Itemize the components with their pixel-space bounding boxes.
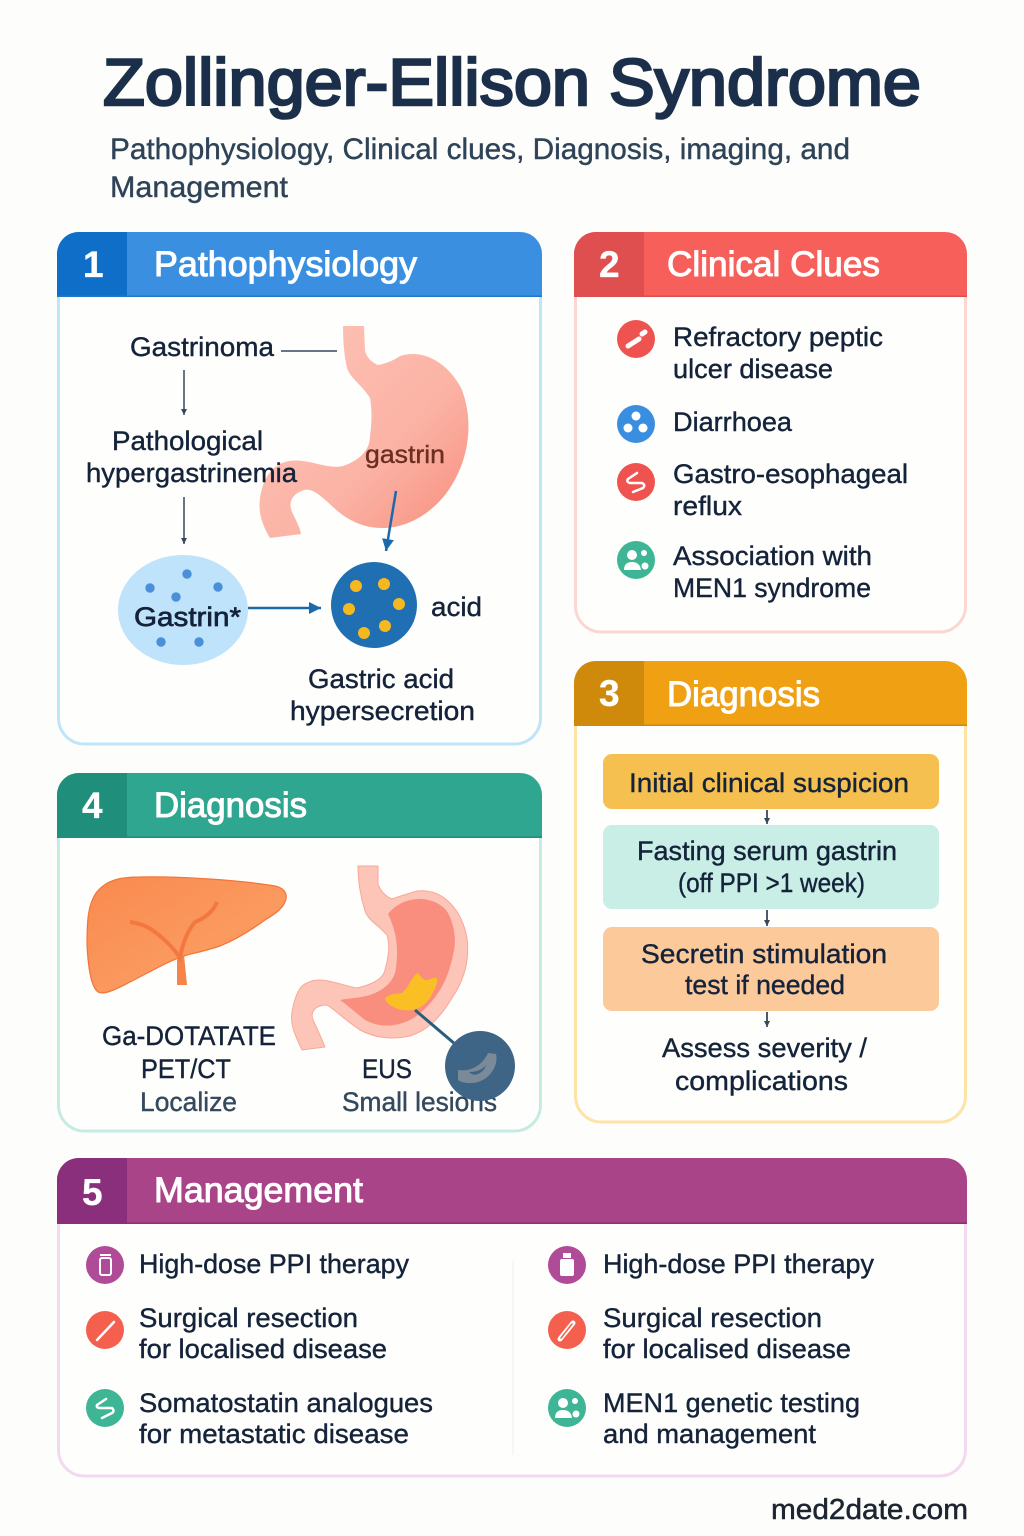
clue: diarrhoea [617,405,793,443]
gastrin cell [118,555,248,665]
header: clinical clues: Clinical Clues [667,245,880,284]
step: secretin stimulation test [603,927,939,1011]
subtitle: Pathophysiology, Clinical clues, Diagnosis, imaging, and [110,133,850,166]
step: initial clinical suspicion: Initial clinical suspicion [629,768,909,798]
panel: clinical clues [574,232,967,632]
item: high-dose ppi therapy [86,1246,409,1284]
panel: diagnosis pathway [574,661,967,1122]
clue: refractory peptic ulcer disease: ulcer disease [673,354,833,384]
step: secretin stimulation test: Secretin stimulation [641,939,887,969]
header: pathophysiology: 1 [83,244,104,285]
step: initial clinical suspicion [603,754,939,809]
clue: association with MEN1 syndrome: Association with [673,541,872,571]
step: assess severity: Assess severity / [662,1033,867,1063]
item: surgical resection (right): Surgical resection [603,1303,822,1333]
step: secretin stimulation test: test if needed [685,970,845,1000]
label: gastrin on stomach: gastrin [365,441,445,469]
arrow: hypergastrinemia to gastrin [183,497,185,544]
item: surgical resection (right) [548,1303,851,1364]
clue: association with MEN1 syndrome: MEN1 syndrome [673,573,871,603]
panel: management [57,1158,967,1476]
header: diagnosis [57,773,542,838]
header: diagnosis: Diagnosis [154,786,307,825]
clue: gastro-esophageal reflux [617,459,908,521]
label: ga-dotatate pet/ct [102,1021,276,1117]
item: surgical resection (right): for localised disease [603,1334,851,1364]
endoscopic ultrasound callout [415,1010,515,1101]
item: high-dose ppi therapy (right) [548,1246,874,1284]
label: eus small lesions [342,1054,497,1117]
label: gastric acid hypersecretion: Gastric acid [308,664,454,694]
label: ga-dotatate pet/ct: PET/CT [141,1054,231,1084]
header: pathophysiology: Pathophysiology [154,245,418,284]
label: gastrinoma with connector: Gastrinoma [130,332,275,362]
acid cell [331,562,417,648]
label: gastric acid hypersecretion: hypersecretion [290,696,475,726]
label: ga-dotatate pet/ct: Ga-DOTATATE [102,1021,276,1051]
item: surgical resection [86,1303,387,1364]
source credit: med2date.com [771,1494,968,1526]
label: pathological hypergastrinemia: Pathological [112,426,263,456]
panel: pathophysiology [57,232,542,744]
step: fasting serum gastrin [603,825,939,909]
arrow: gastrinoma to hypergastrinemia [183,370,185,415]
item: somatostatin analogues: Somatostatin analogues [139,1388,433,1418]
step: assess severity [662,1033,867,1096]
item: men1 genetic testing [548,1388,860,1449]
header: management: 5 [82,1172,103,1213]
arrow [766,1012,768,1027]
clue: gastro-esophageal reflux: reflux [673,491,743,521]
arrow: gastrin to acid [248,607,321,609]
stomach illustration [259,326,468,538]
item: surgical resection: for localised disease [139,1334,387,1364]
arrow [766,810,768,824]
label: gastric acid hypersecretion [290,664,475,726]
label: pathological hypergastrinemia: hypergastrinemia [86,458,298,488]
header: management: Management [154,1171,363,1210]
stomach cross-section [292,866,468,1050]
label: pathological hypergastrinemia [86,426,298,488]
header: diagnosis [574,661,967,726]
panel: diagnosis imaging [57,773,542,1131]
subtitle [110,133,850,204]
step: assess severity: complications [675,1066,848,1096]
header: diagnosis: 3 [599,673,620,714]
liver illustration [87,877,286,993]
clue: gastro-esophageal reflux: Gastro-esophageal [673,459,908,489]
title: Zollinger-Ellison Syndrome [103,45,921,119]
item: somatostatin analogues: for metastatic disease [139,1419,409,1449]
arrow: stomach to parietal cell [386,491,396,551]
clue: refractory peptic ulcer disease [617,320,883,384]
clue: diarrhoea: Diarrhoea [673,407,793,437]
item: men1 genetic testing: and management [603,1419,816,1449]
label: ga-dotatate pet/ct: Localize [140,1087,237,1117]
label: eus small lesions: Small lesions [342,1087,497,1117]
header: clinical clues [574,232,967,297]
clue: association with MEN1 syndrome [617,541,872,603]
label: acid: acid [431,592,482,622]
step: fasting serum gastrin: (off PPI >1 week) [678,868,865,898]
item: men1 genetic testing: MEN1 genetic testing [603,1388,860,1418]
header: management [57,1158,967,1224]
header: diagnosis: 4 [82,785,103,826]
header: diagnosis: Diagnosis [667,675,820,714]
gastrin cell: Gastrin* [134,602,242,632]
header: clinical clues: 2 [599,244,620,285]
item: high-dose ppi therapy: High-dose PPI therapy [139,1249,409,1279]
item: somatostatin analogues [86,1388,433,1449]
subtitle: Management [110,171,289,204]
clue: refractory peptic ulcer disease: Refractory peptic [673,322,883,352]
item: high-dose ppi therapy (right): High-dose PPI therapy [603,1249,874,1279]
label: eus small lesions: EUS [362,1054,412,1084]
item: surgical resection: Surgical resection [139,1303,358,1333]
step: fasting serum gastrin: Fasting serum gastrin [637,836,897,866]
arrow [766,910,768,926]
header: pathophysiology [57,232,542,297]
